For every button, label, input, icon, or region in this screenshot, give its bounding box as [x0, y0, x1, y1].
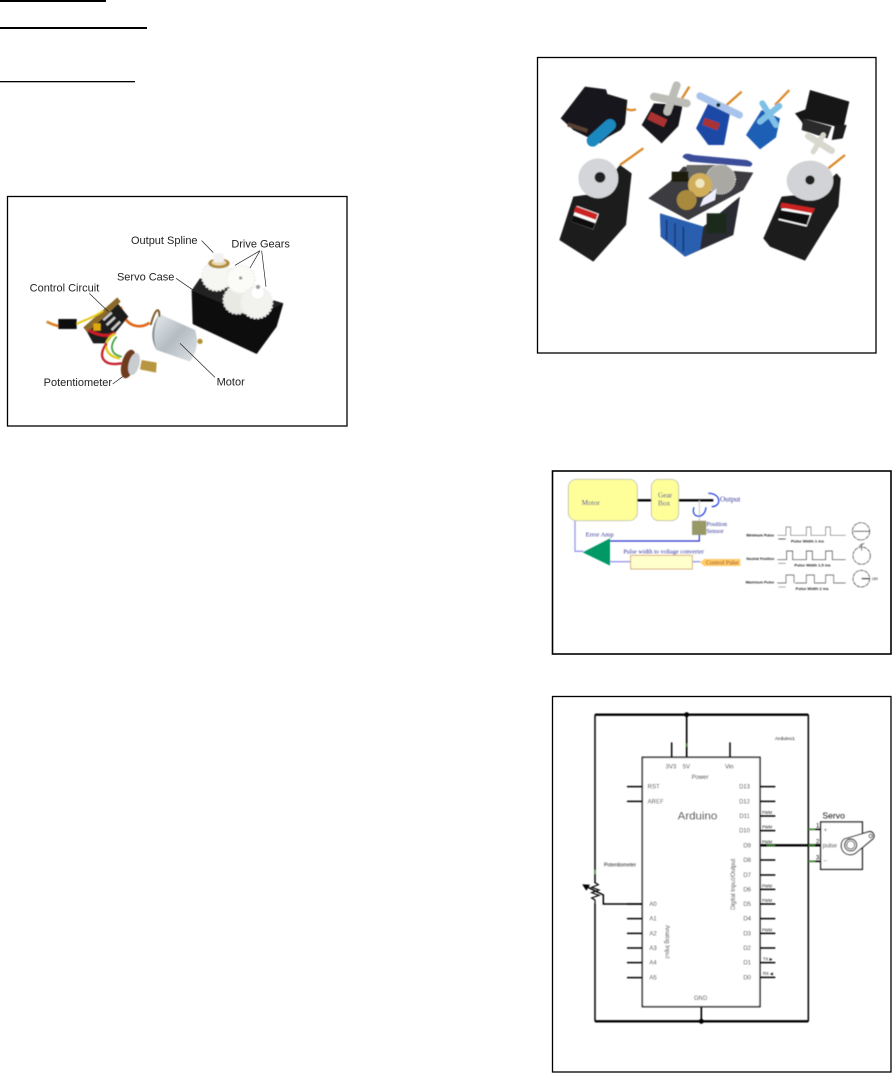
component: Arduino board: D13: [739, 785, 751, 791]
heading rule: second: [0, 27, 147, 29]
component: potentiometer symbol: [583, 883, 642, 904]
panel: Arduino servo schematic: [552, 696, 891, 1072]
block: error amp: Error Amp: [586, 532, 614, 539]
component: Arduino board: D0: [743, 975, 752, 981]
pulse diagram: minimum: [746, 523, 870, 543]
component: servo: Servo: [822, 811, 845, 821]
pulse diagram: maximum: Pulse Width 2 ms: [796, 586, 829, 591]
label: Servo Case: Servo Case: [117, 271, 174, 283]
component: Arduino board: 5V: [683, 765, 690, 771]
heading rule: third: [0, 81, 135, 82]
component: servo: [816, 811, 874, 869]
component: Arduino board: A4: [649, 961, 657, 967]
pulse diagram: minimum: Minimum Pulse: [746, 534, 774, 538]
block: position sensor: Position: [706, 521, 728, 528]
block: pulse width to voltage converter: Pulse width to voltage converter: [623, 549, 705, 556]
pulse diagram: neutral: Neutral Position: [746, 557, 774, 561]
component: Arduino board: 3V3: [666, 765, 677, 771]
component: Arduino board: D1: [743, 961, 752, 967]
component: Arduino board: D8: [743, 858, 752, 864]
component: Arduino board: AREF: [648, 799, 664, 805]
label: output: Output: [720, 495, 740, 504]
pulse diagram: maximum: 180: [872, 577, 878, 581]
label: Potentiometer: Potentiometer: [44, 377, 112, 389]
block: gear box: [651, 479, 679, 521]
label: Potentiometer: Potentiometer: [604, 863, 636, 869]
component: Arduino board: PWM: [762, 825, 773, 830]
pulse diagram: neutral: [746, 543, 870, 568]
tag: control pulse: Control Pulse: [706, 560, 739, 566]
panel: servo product photo: [538, 58, 876, 353]
component: servo: –: [824, 859, 828, 865]
block: gear box: Gear: [658, 491, 673, 500]
pulse diagram: neutral: Pulse Width 1.5 ms: [794, 563, 831, 568]
component: Arduino board: A0: [649, 902, 657, 908]
component: servo: 3: [816, 856, 820, 862]
panel: servo control block diagram: [552, 471, 891, 654]
component: Arduino board: D7: [743, 873, 752, 879]
component: Arduino board: Digital Input/Output: [731, 858, 737, 910]
wire: power and ground rails: [595, 712, 821, 1024]
component: Arduino board: D9: [743, 843, 752, 849]
component: Arduino board: RX ◀: [763, 971, 774, 976]
tag: control pulse: [700, 559, 740, 566]
component: Arduino board: D4: [743, 917, 752, 923]
block: motor: [568, 479, 637, 521]
component: Arduino board: RST: [648, 785, 660, 791]
component: Arduino board: Power: [692, 775, 709, 781]
component: Arduino board: GND: [694, 996, 708, 1002]
component: Arduino board: D10: [739, 829, 751, 835]
component: Arduino board: A3: [649, 946, 657, 952]
label: Motor: Motor: [217, 376, 245, 388]
component: Arduino board: D12: [739, 799, 751, 805]
component: Arduino board: Vin: [725, 765, 734, 771]
component: Arduino board: D5: [743, 902, 752, 908]
component: Arduino board: D3: [743, 931, 752, 937]
component: Arduino board: Arduino: [678, 810, 717, 822]
label: Control Circuit: Control Circuit: [30, 283, 99, 295]
heading rule: first: [0, 0, 106, 2]
pulse diagram: maximum: [746, 570, 878, 591]
component: Arduino board: A1: [649, 917, 657, 923]
block: motor: Motor: [582, 498, 601, 507]
component: servo: pulse: [823, 844, 838, 850]
component: servo: +: [824, 828, 828, 834]
block: gear box: Box: [658, 498, 671, 507]
photo: disassembled servo parts: [47, 253, 283, 380]
component: Arduino board: TX ▶: [763, 957, 773, 962]
component: Arduino board: D11: [739, 814, 751, 820]
component: Arduino board: [627, 742, 775, 1007]
component: Arduino board: D6: [743, 887, 752, 893]
label: Arduino1: Arduino1: [775, 736, 795, 742]
pulse diagram: maximum: Maximum Pulse: [746, 581, 774, 585]
block: position sensor: Sensor: [706, 528, 724, 535]
component: Arduino board: PWM: [762, 927, 773, 932]
pulse diagram: minimum: Pulse Width 1 ms: [791, 538, 825, 543]
component: Arduino board: PWM: [762, 839, 773, 844]
block: pulse width to voltage converter: [623, 549, 705, 569]
component: Arduino board: D2: [743, 946, 752, 952]
component: Arduino board: PWM: [762, 883, 773, 888]
label: Output Spline: Output Spline: [131, 235, 198, 247]
photo: assorted servos: [559, 85, 849, 262]
block: error amp: [583, 532, 614, 566]
component: Arduino board: PWM: [762, 898, 773, 903]
component: Arduino board: PWM: [762, 810, 773, 815]
component: Arduino board: A2: [649, 931, 657, 937]
component: Arduino board: Analog Input: [664, 925, 670, 959]
block: position sensor: [692, 521, 728, 535]
component: Arduino board: A5: [649, 976, 657, 982]
component: servo: 1: [816, 824, 820, 830]
component: servo: 2: [816, 840, 820, 846]
panel: servo anatomy photo: [8, 196, 347, 426]
label: Drive Gears: Drive Gears: [231, 239, 290, 251]
